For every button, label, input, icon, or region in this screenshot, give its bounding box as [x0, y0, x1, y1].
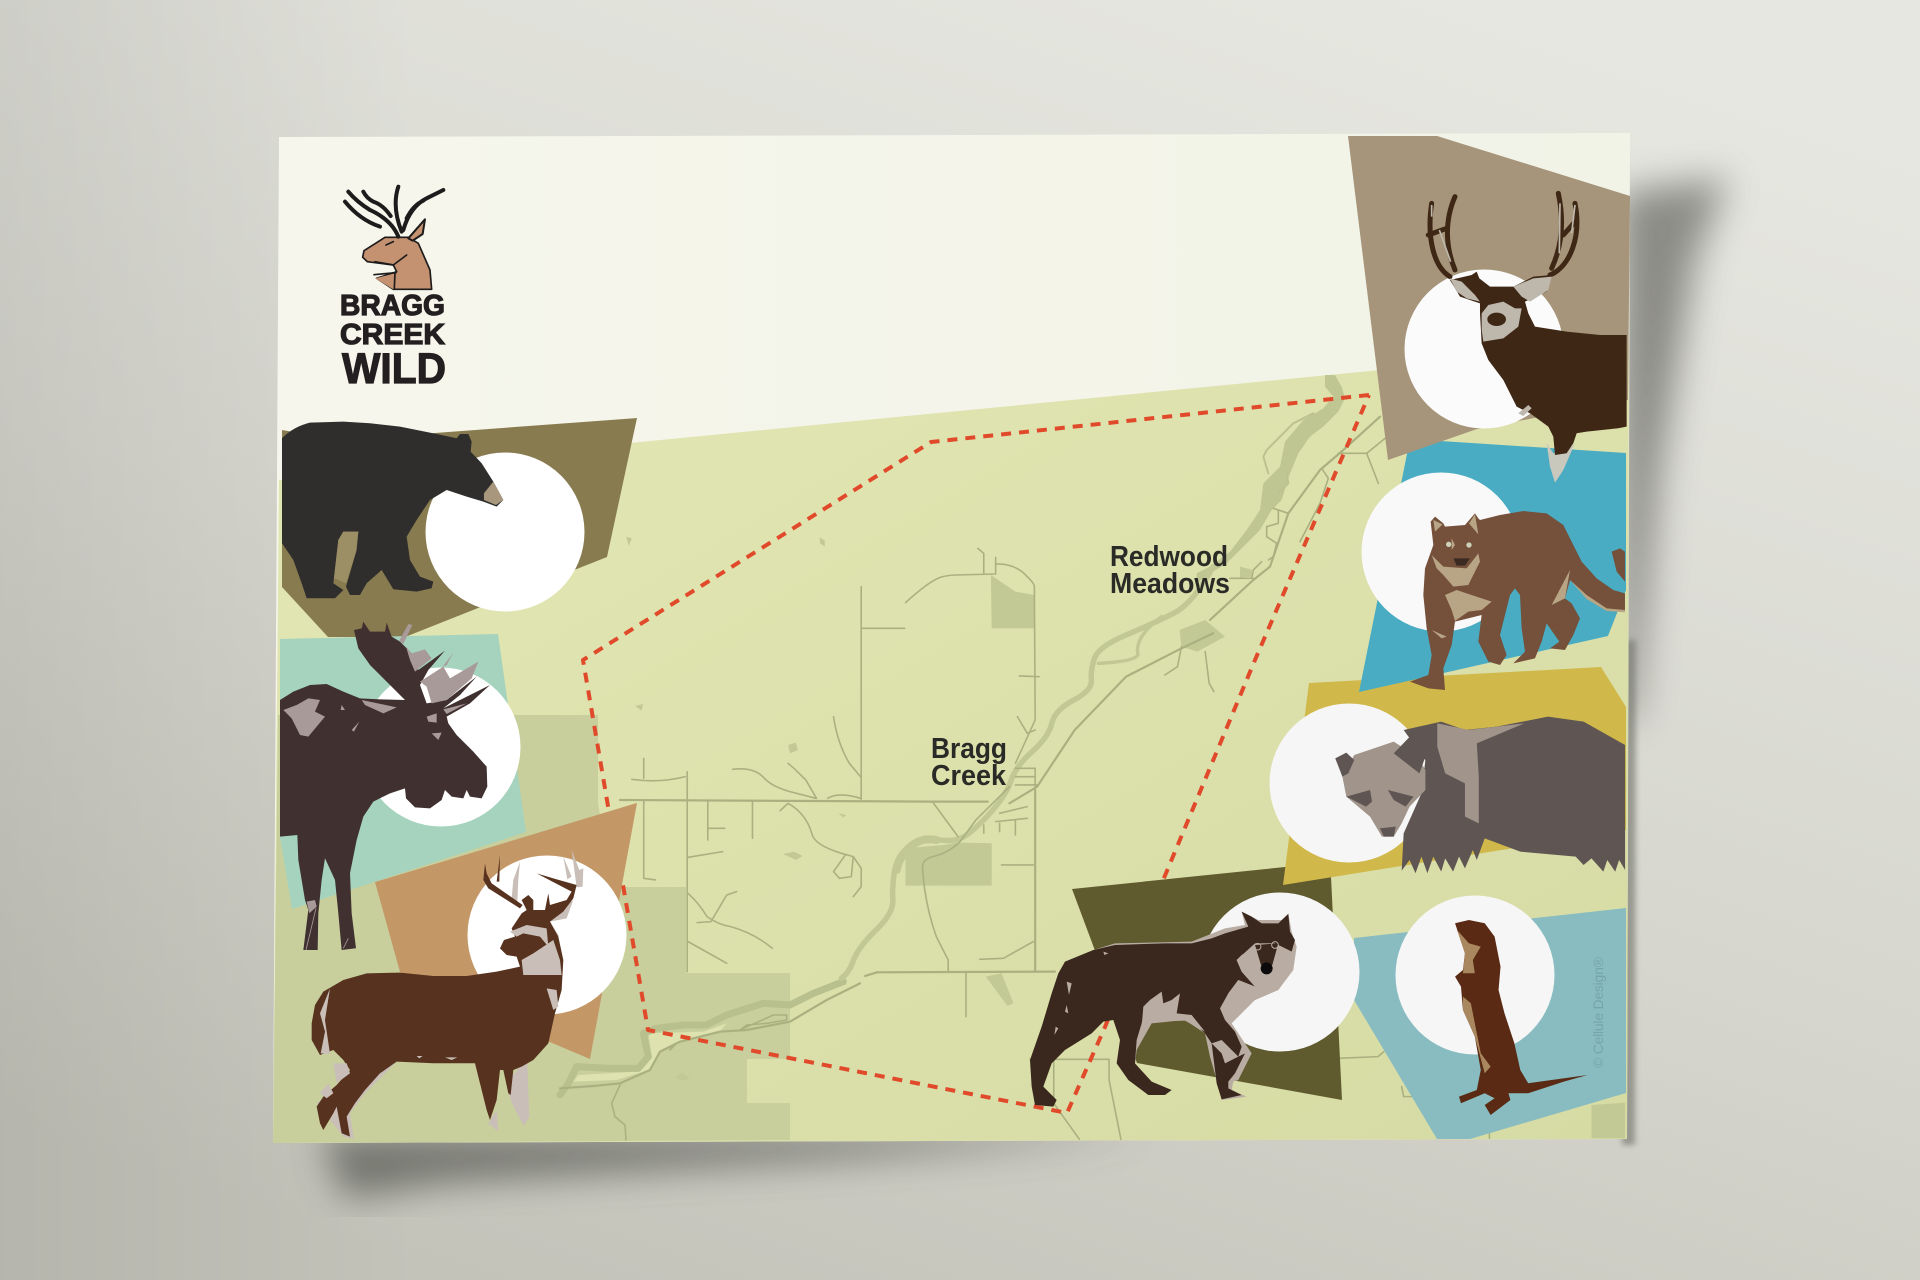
animal: black bear: [282, 422, 503, 598]
circle: bear: [426, 452, 584, 612]
road: [751, 802, 753, 838]
road: [1002, 864, 1033, 866]
copyright credit: © Cellule Design®: [1590, 956, 1606, 1068]
paper shadow right: [1620, 178, 1728, 720]
northeast river and roads: [1197, 375, 1385, 620]
wolf nose: [1261, 962, 1273, 974]
cougar tail tan edge: [1570, 580, 1625, 612]
mule deer chest patch: [1518, 405, 1532, 416]
panel: moose backing: [280, 634, 526, 909]
moose body: [280, 622, 490, 950]
road: [707, 802, 709, 840]
road: [1034, 790, 1036, 972]
river band: [560, 982, 843, 1095]
bear leg highlight: [334, 532, 358, 583]
deer body: [312, 873, 577, 1137]
mule deer throat tuft: [1547, 443, 1575, 483]
grizzly shoulder: [1437, 723, 1524, 823]
grizzly body: [1402, 717, 1625, 873]
pond: [675, 1073, 690, 1081]
road 1: [1054, 1060, 1079, 1139]
river main: [841, 567, 1213, 978]
road: [697, 892, 737, 923]
otter throat: [1457, 930, 1481, 973]
road 4: [1402, 1087, 1412, 1097]
parcel north: [991, 575, 1034, 628]
road: [922, 787, 1009, 972]
panel: cougar backing: [1359, 439, 1626, 692]
deer light markings: [320, 925, 562, 1098]
road: [643, 758, 645, 778]
highway: [560, 983, 860, 1088]
road: [828, 795, 860, 798]
logo: Bragg Creek Wild: [340, 187, 446, 393]
circle: mule deer: [1404, 270, 1564, 428]
parcel: [1240, 567, 1253, 578]
south branch road: [612, 1085, 626, 1140]
road: [905, 557, 996, 603]
paper shadow edge right: [1622, 640, 1636, 1145]
road: [834, 717, 860, 777]
map roads and river: [560, 375, 1625, 1140]
moose shoulder fur: [283, 698, 442, 913]
circle: wolf: [1200, 892, 1360, 1052]
road: [861, 627, 905, 629]
panel: black bear backing: [282, 418, 637, 637]
wolf face ruff: [1222, 943, 1295, 1022]
mule deer antler highlights: [1432, 203, 1575, 262]
deer dark antlers: [483, 855, 523, 908]
branch road south: [1367, 453, 1378, 483]
road: [688, 893, 772, 948]
road: [996, 564, 1035, 763]
label: Redwood Meadows: Redwood: [1110, 541, 1228, 573]
map base: [273, 345, 1629, 1143]
label: Bragg Creek: Bragg: [931, 733, 1007, 765]
branch road: [1300, 468, 1328, 542]
bear muzzle: [484, 482, 503, 505]
branch roads east: [1165, 647, 1214, 692]
southwest river and roads: [560, 982, 860, 1140]
otter body: [1455, 920, 1588, 1115]
mule deer body: [1450, 272, 1627, 455]
panel: grizzly backing: [1283, 667, 1626, 885]
animal: otter: [1455, 920, 1588, 1115]
grizzly ear: [1335, 753, 1354, 777]
road 2: [1030, 1059, 1121, 1139]
side channel: [1263, 413, 1313, 493]
animal: wolf: [1030, 912, 1297, 1107]
road: [780, 803, 861, 897]
wolf leg fur: [1212, 1040, 1238, 1063]
panel: wolf backing: [1072, 867, 1342, 1100]
road: [1017, 717, 1035, 733]
road 3: [1338, 1052, 1384, 1058]
road: [980, 942, 1033, 959]
animal: cougar: [1410, 511, 1625, 690]
circle: white-tailed deer: [468, 856, 626, 1014]
grizzly head: [1342, 742, 1425, 837]
label: Redwood Meadows: [1110, 541, 1230, 600]
circle: grizzly: [1270, 704, 1428, 862]
road: [1019, 675, 1039, 678]
survey boundary dashed line: [583, 395, 1369, 1113]
streets: [1230, 508, 1288, 578]
road loop: [834, 855, 853, 878]
branch road east: [1338, 438, 1385, 453]
road: [860, 587, 862, 799]
mule deer face: [1482, 302, 1522, 342]
river side channel: [1098, 617, 1162, 663]
parcel southeast: [1591, 1103, 1625, 1138]
channels: [660, 1015, 787, 1052]
road: [644, 801, 656, 880]
otter belly: [1463, 997, 1491, 1073]
circle: moose: [362, 668, 520, 826]
cougar nose: [1453, 558, 1470, 566]
cougar tan markings: [1432, 514, 1570, 638]
road: [686, 772, 688, 972]
parcel redwood: [1179, 620, 1225, 652]
road: [708, 827, 725, 829]
light valley floor: [573, 1023, 727, 1082]
cougar tail tip: [1612, 548, 1625, 582]
panel: white-tailed deer backing: [375, 803, 637, 1059]
road: [932, 802, 958, 837]
road: [632, 777, 685, 781]
river braid: [1197, 375, 1345, 583]
paper shadow bottom: [320, 1135, 1150, 1198]
icon: elk head: [345, 187, 443, 289]
label: Bragg Creek: Creek: [931, 760, 1007, 792]
river wide bend: [897, 839, 936, 870]
wordmark: WILD: [342, 345, 446, 393]
main east west road: [620, 800, 988, 802]
cougar eyes: [1446, 542, 1472, 548]
wolf belly fur: [1142, 992, 1205, 1032]
road: [965, 972, 967, 1017]
deer light antler tines: [512, 850, 583, 937]
road: [978, 548, 984, 574]
label: Redwood Meadows: Meadows: [1110, 568, 1230, 600]
wolf snout: [1255, 943, 1278, 965]
ponds: [626, 537, 1013, 1006]
south highway: [877, 971, 1055, 973]
mule deer ears: [1450, 277, 1552, 302]
highway: [1009, 633, 1213, 803]
wolf body: [1030, 912, 1295, 1107]
roads south of wolf: [1030, 1052, 1625, 1139]
animal: mule deer: [1428, 193, 1627, 483]
wordmark: BRAGG: [340, 290, 445, 322]
circle: otter: [1396, 896, 1554, 1054]
circle: cougar: [1362, 472, 1520, 632]
animal: white-tailed deer: [312, 850, 583, 1139]
label: Bragg Creek: [931, 733, 1007, 792]
poster sheet: [273, 133, 1630, 1143]
map darker land parcels: [273, 715, 790, 1143]
cougar body: [1410, 511, 1625, 690]
wordmark: [340, 290, 446, 393]
deer light underlay: [317, 1062, 529, 1139]
wolf eyes: [1254, 942, 1278, 950]
panel: mule deer backing: [1348, 136, 1630, 460]
animal: grizzly: [1335, 717, 1625, 873]
wordmark: CREEK: [340, 319, 445, 351]
road: [688, 942, 727, 963]
road: [788, 763, 817, 798]
bear body: [282, 422, 503, 598]
grizzly face markings: [1346, 727, 1425, 837]
highway: [1210, 417, 1380, 620]
mule deer antlers: [1428, 193, 1577, 277]
animal: moose: [280, 622, 490, 950]
wolf light outline: [1093, 912, 1297, 1100]
town streets: [984, 768, 1037, 835]
parcel central: [905, 843, 992, 886]
wolf flank flecks: [1054, 952, 1108, 1035]
mule deer nose: [1487, 313, 1506, 326]
south highway link: [865, 972, 877, 976]
road: [688, 852, 723, 857]
panel: otter backing: [1354, 908, 1626, 1139]
road: [733, 769, 816, 798]
moose leg highlight: [306, 908, 348, 950]
road 5: [1488, 1130, 1490, 1138]
backdrop left falloff: [0, 0, 420, 1280]
moose antler palm: [399, 624, 478, 714]
